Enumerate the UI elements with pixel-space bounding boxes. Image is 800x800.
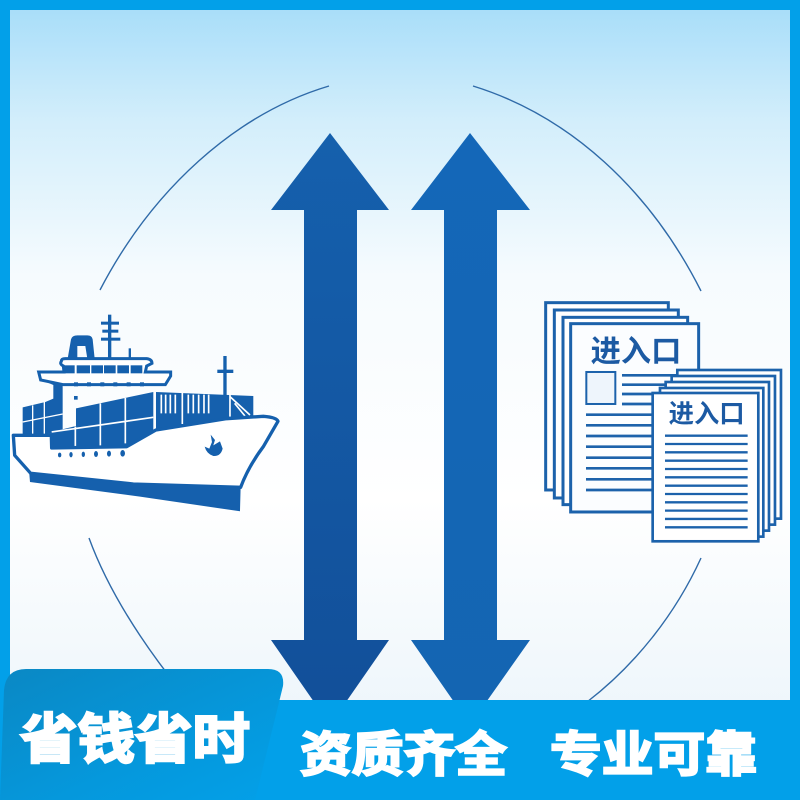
ship emblem bbox=[205, 435, 223, 456]
large document stack bbox=[546, 303, 699, 512]
icon: container ship bbox=[13, 315, 278, 511]
slogan: save money and time: 省钱省时 bbox=[20, 710, 250, 770]
ship portholes bbox=[58, 450, 125, 457]
icon: import documents bbox=[546, 303, 781, 541]
bottom band bbox=[0, 700, 800, 800]
small document lines bbox=[665, 436, 748, 527]
small document title: 进入口 bbox=[669, 400, 745, 428]
large document title: 进入口 bbox=[591, 335, 681, 368]
ship bridge bbox=[39, 359, 171, 385]
ship hull bbox=[13, 416, 278, 487]
slogan: full qualifications: 资质齐全 bbox=[300, 729, 507, 782]
arrow: right double-headed bbox=[411, 133, 530, 725]
photo placeholder bbox=[586, 372, 615, 404]
ship container dividers bbox=[23, 390, 250, 447]
ship containers bbox=[23, 380, 253, 448]
arrow: left double-headed bbox=[271, 133, 389, 725]
slogan: professional and reliable: 专业可靠 bbox=[550, 729, 757, 782]
bottom-left tab bbox=[0, 669, 283, 800]
small document stack bbox=[653, 370, 781, 541]
ship keel bbox=[29, 474, 241, 511]
circle arcs bbox=[89, 86, 701, 702]
large document lines bbox=[586, 375, 677, 490]
ship windows bbox=[64, 365, 144, 400]
ship mast bbox=[68, 315, 233, 419]
